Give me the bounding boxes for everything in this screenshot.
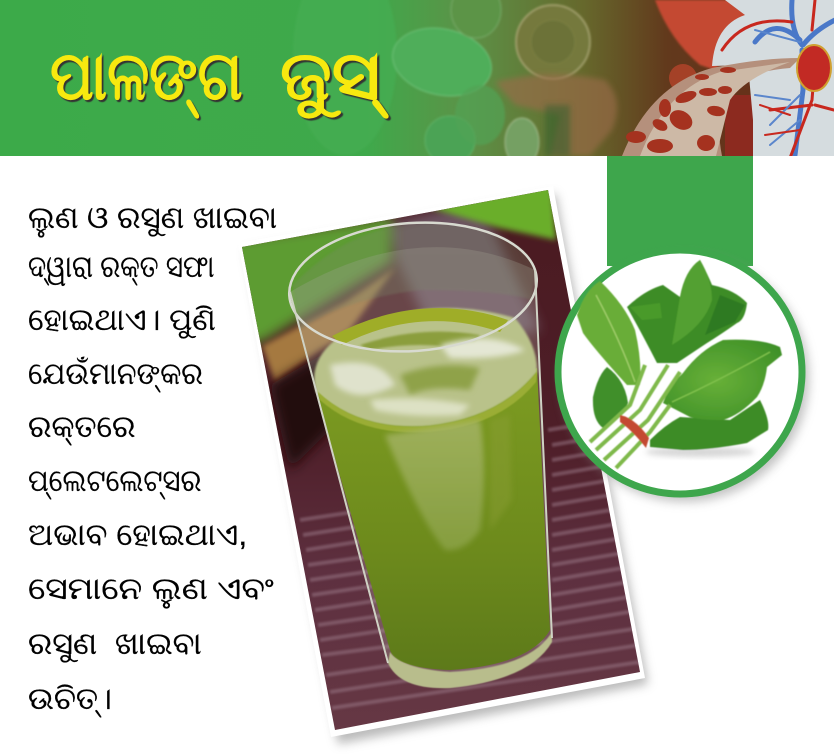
heart panel <box>712 0 834 156</box>
body text: ଦ୍ୱାରା ରକ୍ତ ସଫା <box>28 249 214 284</box>
red organ <box>654 0 745 69</box>
photo frame <box>238 186 645 737</box>
body text: ସେମାନେ ଲୁଣ ଏବଂ <box>28 571 274 606</box>
table slats <box>300 415 640 708</box>
blood cells <box>390 0 592 156</box>
artery <box>622 58 800 156</box>
photo of green juice <box>230 184 650 740</box>
red blood cells in artery <box>626 67 736 153</box>
body text: ଉଚିତ୍। <box>28 681 112 716</box>
title: ଜୁସ୍ <box>280 38 380 114</box>
glass <box>285 215 552 688</box>
green tab <box>607 156 753 266</box>
photo frame shadow <box>246 194 648 744</box>
stems <box>590 365 680 468</box>
body text: ରସୁଣ ଖାଇବା <box>28 626 202 661</box>
heart and vessels <box>722 0 834 158</box>
body text: ରକ୍ତରେ <box>28 409 136 444</box>
body text: ଯେଉଁମାନଙ୍କର <box>28 356 203 391</box>
body text: ପ୍ଲେଟଲେଟ୍ସର <box>28 463 201 498</box>
spinach leaves <box>577 260 782 468</box>
body text <box>28 200 277 718</box>
body text: ଅଭାବ ହୋଇଥାଏ, <box>28 517 247 552</box>
foam <box>314 308 537 432</box>
banner background <box>0 0 834 166</box>
title: ପାଳଙ୍ଗ <box>50 38 243 114</box>
title <box>50 38 392 122</box>
juice highlight <box>385 420 484 550</box>
spinach badge <box>558 250 802 494</box>
body text: ଲୁଣ ଓ ରସୁଣ ଖାଇବା <box>28 200 277 235</box>
blurred background: bowl, greens and table <box>230 184 556 470</box>
body text: ହୋଇଥାଏ। ପୁଣି <box>28 302 216 337</box>
circle shadow <box>561 254 809 502</box>
